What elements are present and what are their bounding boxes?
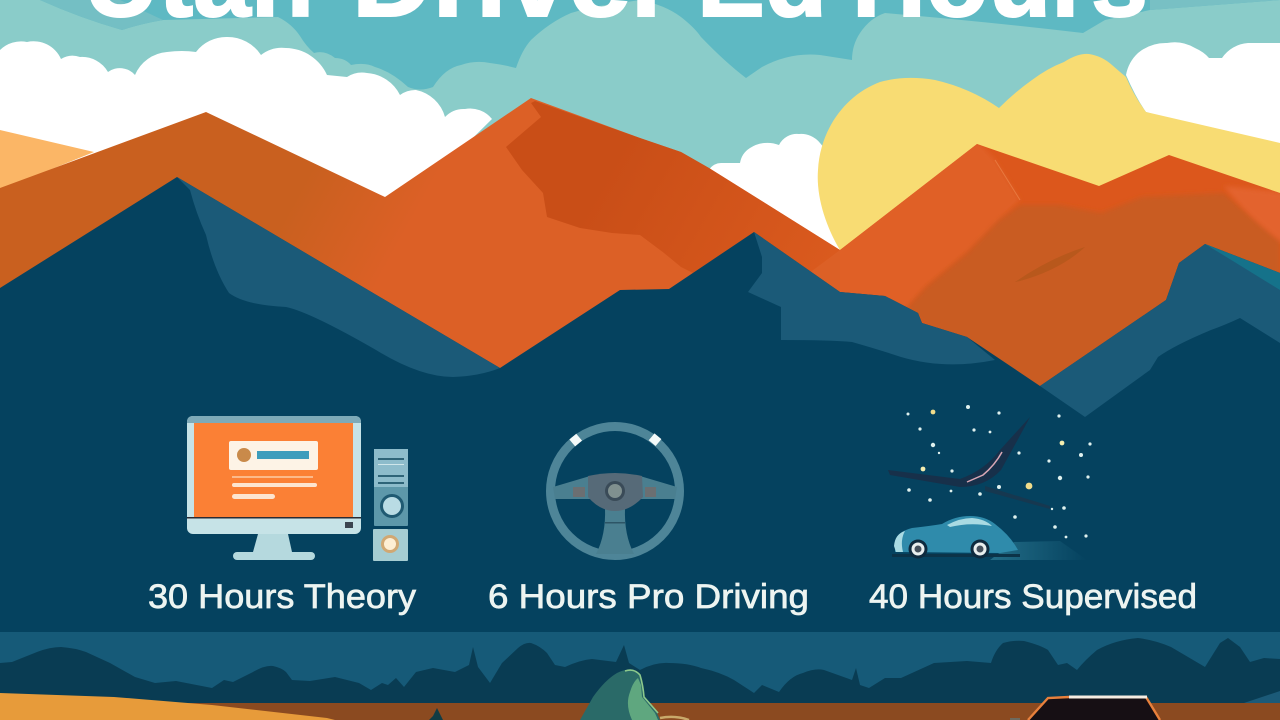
hill: tan xyxy=(0,130,94,190)
lower band and treeline xyxy=(0,632,1280,707)
road xyxy=(0,703,1280,720)
cloud: small white behind ridge xyxy=(709,134,860,262)
icon: night driving clock and car xyxy=(888,405,1092,560)
stars xyxy=(906,405,1092,538)
label: supervised hours: 40 Hours Supervised xyxy=(869,578,1197,616)
computer tower xyxy=(373,449,408,561)
clock hands xyxy=(888,417,1050,509)
small dark tree xyxy=(429,708,443,720)
icon: computer xyxy=(187,416,408,561)
title xyxy=(84,0,1148,39)
mountains: dark blue range xyxy=(0,177,1280,632)
monitor xyxy=(187,416,361,560)
label: pro driving hours: 6 Hours Pro Driving xyxy=(488,578,809,616)
sun xyxy=(818,54,1280,262)
bush xyxy=(580,670,689,720)
icon: steering wheel xyxy=(550,426,680,556)
cloud: left white xyxy=(0,37,492,210)
car front xyxy=(1010,696,1160,720)
sand hill xyxy=(0,693,335,720)
sky xyxy=(0,0,1280,300)
cloud: right white xyxy=(1126,42,1280,150)
mountains: orange range xyxy=(0,98,1280,400)
car xyxy=(892,516,1087,560)
label: theory hours: 30 Hours Theory xyxy=(148,578,416,616)
